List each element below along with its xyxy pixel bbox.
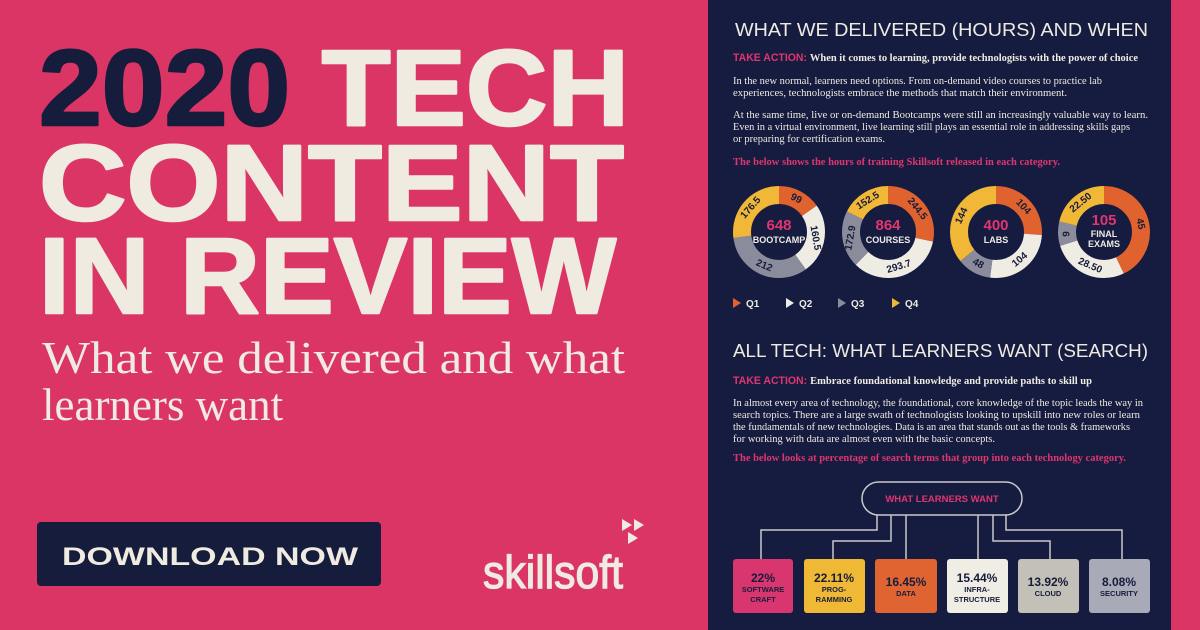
text block: take action 1: At the same time, live or on-demand Bootcamps were still an increasingly valuable way to learn. bbox=[733, 109, 1148, 121]
chart: courses donut: COURSES bbox=[866, 235, 910, 245]
chart: courses donut: 293.7 bbox=[885, 258, 913, 276]
heading: what we delivered: WHAT WE DELIVERED (HOURS) AND WHEN bbox=[735, 20, 1148, 40]
pill: what learners want: WHAT LEARNERS WANT bbox=[885, 494, 999, 505]
chart: final exams donut: 22.50 bbox=[1068, 191, 1095, 215]
boxes: categories: 22.11% bbox=[814, 571, 854, 585]
text block: take action 1: or preparing for certification exams. bbox=[733, 133, 885, 145]
chart: final exams donut: EXAMS bbox=[1088, 239, 1120, 249]
text block: take action 1: Even in a virtual environment, live learning still plays an essential role in addressing skills gaps bbox=[733, 121, 1130, 133]
boxes: categories: PROG- bbox=[822, 585, 847, 594]
logo: skillsoft bbox=[483, 519, 644, 598]
boxes: categories: INFRA- bbox=[964, 585, 990, 594]
pill: what learners want bbox=[862, 482, 1022, 515]
chart: final exams donut: 9 bbox=[1062, 231, 1072, 237]
boxes: categories bbox=[733, 559, 1150, 613]
subtitle: What we delivered and what bbox=[42, 333, 626, 383]
boxes: categories: STRUCTURE bbox=[954, 595, 1000, 604]
boxes: categories: SOFTWARE bbox=[742, 585, 784, 594]
chart: bootcamp donut: 648 bbox=[766, 217, 792, 234]
boxes: categories: 15.44% bbox=[957, 571, 998, 585]
chart: labs donut: 400 bbox=[983, 217, 1009, 234]
connector lines bbox=[761, 515, 1122, 559]
chart: courses donut: 172.9 bbox=[843, 224, 859, 251]
chart: bootcamp donut: 99 bbox=[789, 192, 804, 207]
text block: take action 1: TAKE ACTION: When it comes to learning, provide technologists with the power of choice bbox=[733, 52, 1138, 64]
text block: take action 2: TAKE ACTION: Embrace foundational knowledge and provide paths to skill up bbox=[733, 375, 1092, 387]
logo: skillsoft: skillsoft bbox=[483, 546, 623, 598]
legend: Q1 bbox=[746, 299, 760, 310]
text block: take action 1: The below shows the hours of training Skillsoft released in each category. bbox=[733, 156, 1060, 168]
chart: bootcamp donut: BOOTCAMP bbox=[753, 235, 805, 245]
title bbox=[39, 27, 629, 336]
chart: courses donut: 864 bbox=[875, 217, 901, 234]
title: IN REVIEW bbox=[39, 215, 616, 336]
subtitle: learners want bbox=[42, 380, 284, 430]
legend: Q2 bbox=[799, 299, 813, 310]
heading: all tech: ALL TECH: WHAT LEARNERS WANT (SEARCH) bbox=[733, 341, 1148, 361]
chart: courses donut bbox=[843, 189, 929, 276]
chart: labs donut bbox=[953, 195, 1033, 272]
chart: courses donut: 152.5 bbox=[854, 189, 882, 212]
chart: bootcamp donut: 176.5 bbox=[739, 195, 764, 221]
boxes: categories: CRAFT bbox=[750, 595, 776, 604]
chart: bootcamp donut: 212 bbox=[754, 258, 774, 274]
chart: final exams donut: 28.50 bbox=[1076, 256, 1104, 276]
text block: take action 1: experiences, technologists embrace the methods that match their environment. bbox=[733, 87, 1067, 99]
text block: take action 1 bbox=[733, 52, 1148, 168]
text block: take action 2 bbox=[733, 375, 1143, 464]
boxes: categories: 8.08% bbox=[1102, 575, 1136, 589]
boxes: categories: 16.45% bbox=[886, 575, 927, 589]
boxes: categories: 22% bbox=[751, 571, 775, 585]
chart: labs donut: 48 bbox=[970, 256, 986, 272]
subtitle bbox=[42, 333, 626, 430]
chart: final exams donut bbox=[1062, 191, 1147, 276]
boxes: categories: CLOUD bbox=[1035, 589, 1062, 598]
button: download now bbox=[37, 522, 381, 586]
button: download now: DOWNLOAD NOW bbox=[62, 543, 359, 571]
chart: labs donut: 104 bbox=[1010, 250, 1030, 270]
legend bbox=[733, 298, 919, 310]
text block: take action 2: The below looks at percentage of search terms that group into each technology category. bbox=[733, 452, 1126, 464]
chart: labs donut: 144 bbox=[953, 206, 971, 226]
boxes: categories: SECURITY bbox=[1100, 589, 1138, 598]
text block: take action 2: the fundamentals of new technologies. Data is an area that stands out as the tools & frameworks bbox=[733, 421, 1130, 433]
chart: final exams donut: FINAL bbox=[1091, 229, 1118, 239]
chart: labs donut: LABS bbox=[984, 235, 1008, 245]
chart: bootcamp donut: 160.5 bbox=[807, 225, 823, 252]
chart: final exams donut: 105 bbox=[1091, 212, 1117, 229]
chart: labs donut: 104 bbox=[1013, 197, 1033, 217]
panel: right infographic bbox=[708, 0, 1171, 630]
legend: Q3 bbox=[851, 299, 865, 310]
text block: take action 2: for working with data are almost even with the basic concepts. bbox=[733, 433, 995, 445]
chart: final exams donut: 45 bbox=[1133, 217, 1147, 231]
text block: take action 2: In almost every area of technology, the foundational, core knowledge of the topic leads the way in bbox=[733, 397, 1143, 409]
boxes: categories: DATA bbox=[896, 589, 916, 598]
title: 2020 TECH bbox=[39, 27, 629, 148]
chart: bootcamp donut bbox=[739, 192, 823, 274]
text block: take action 2: search topics. There are a large swath of technologists looking to upskill into new roles or learn bbox=[733, 409, 1140, 421]
title: CONTENT bbox=[39, 122, 624, 243]
text block: take action 1: In the new normal, learners need options. From on-demand video courses to practice lab bbox=[733, 75, 1102, 87]
boxes: categories: RAMMING bbox=[816, 595, 852, 604]
legend: Q4 bbox=[905, 299, 919, 310]
boxes: categories: 13.92% bbox=[1028, 575, 1069, 589]
chart: courses donut: 244.5 bbox=[905, 196, 929, 223]
